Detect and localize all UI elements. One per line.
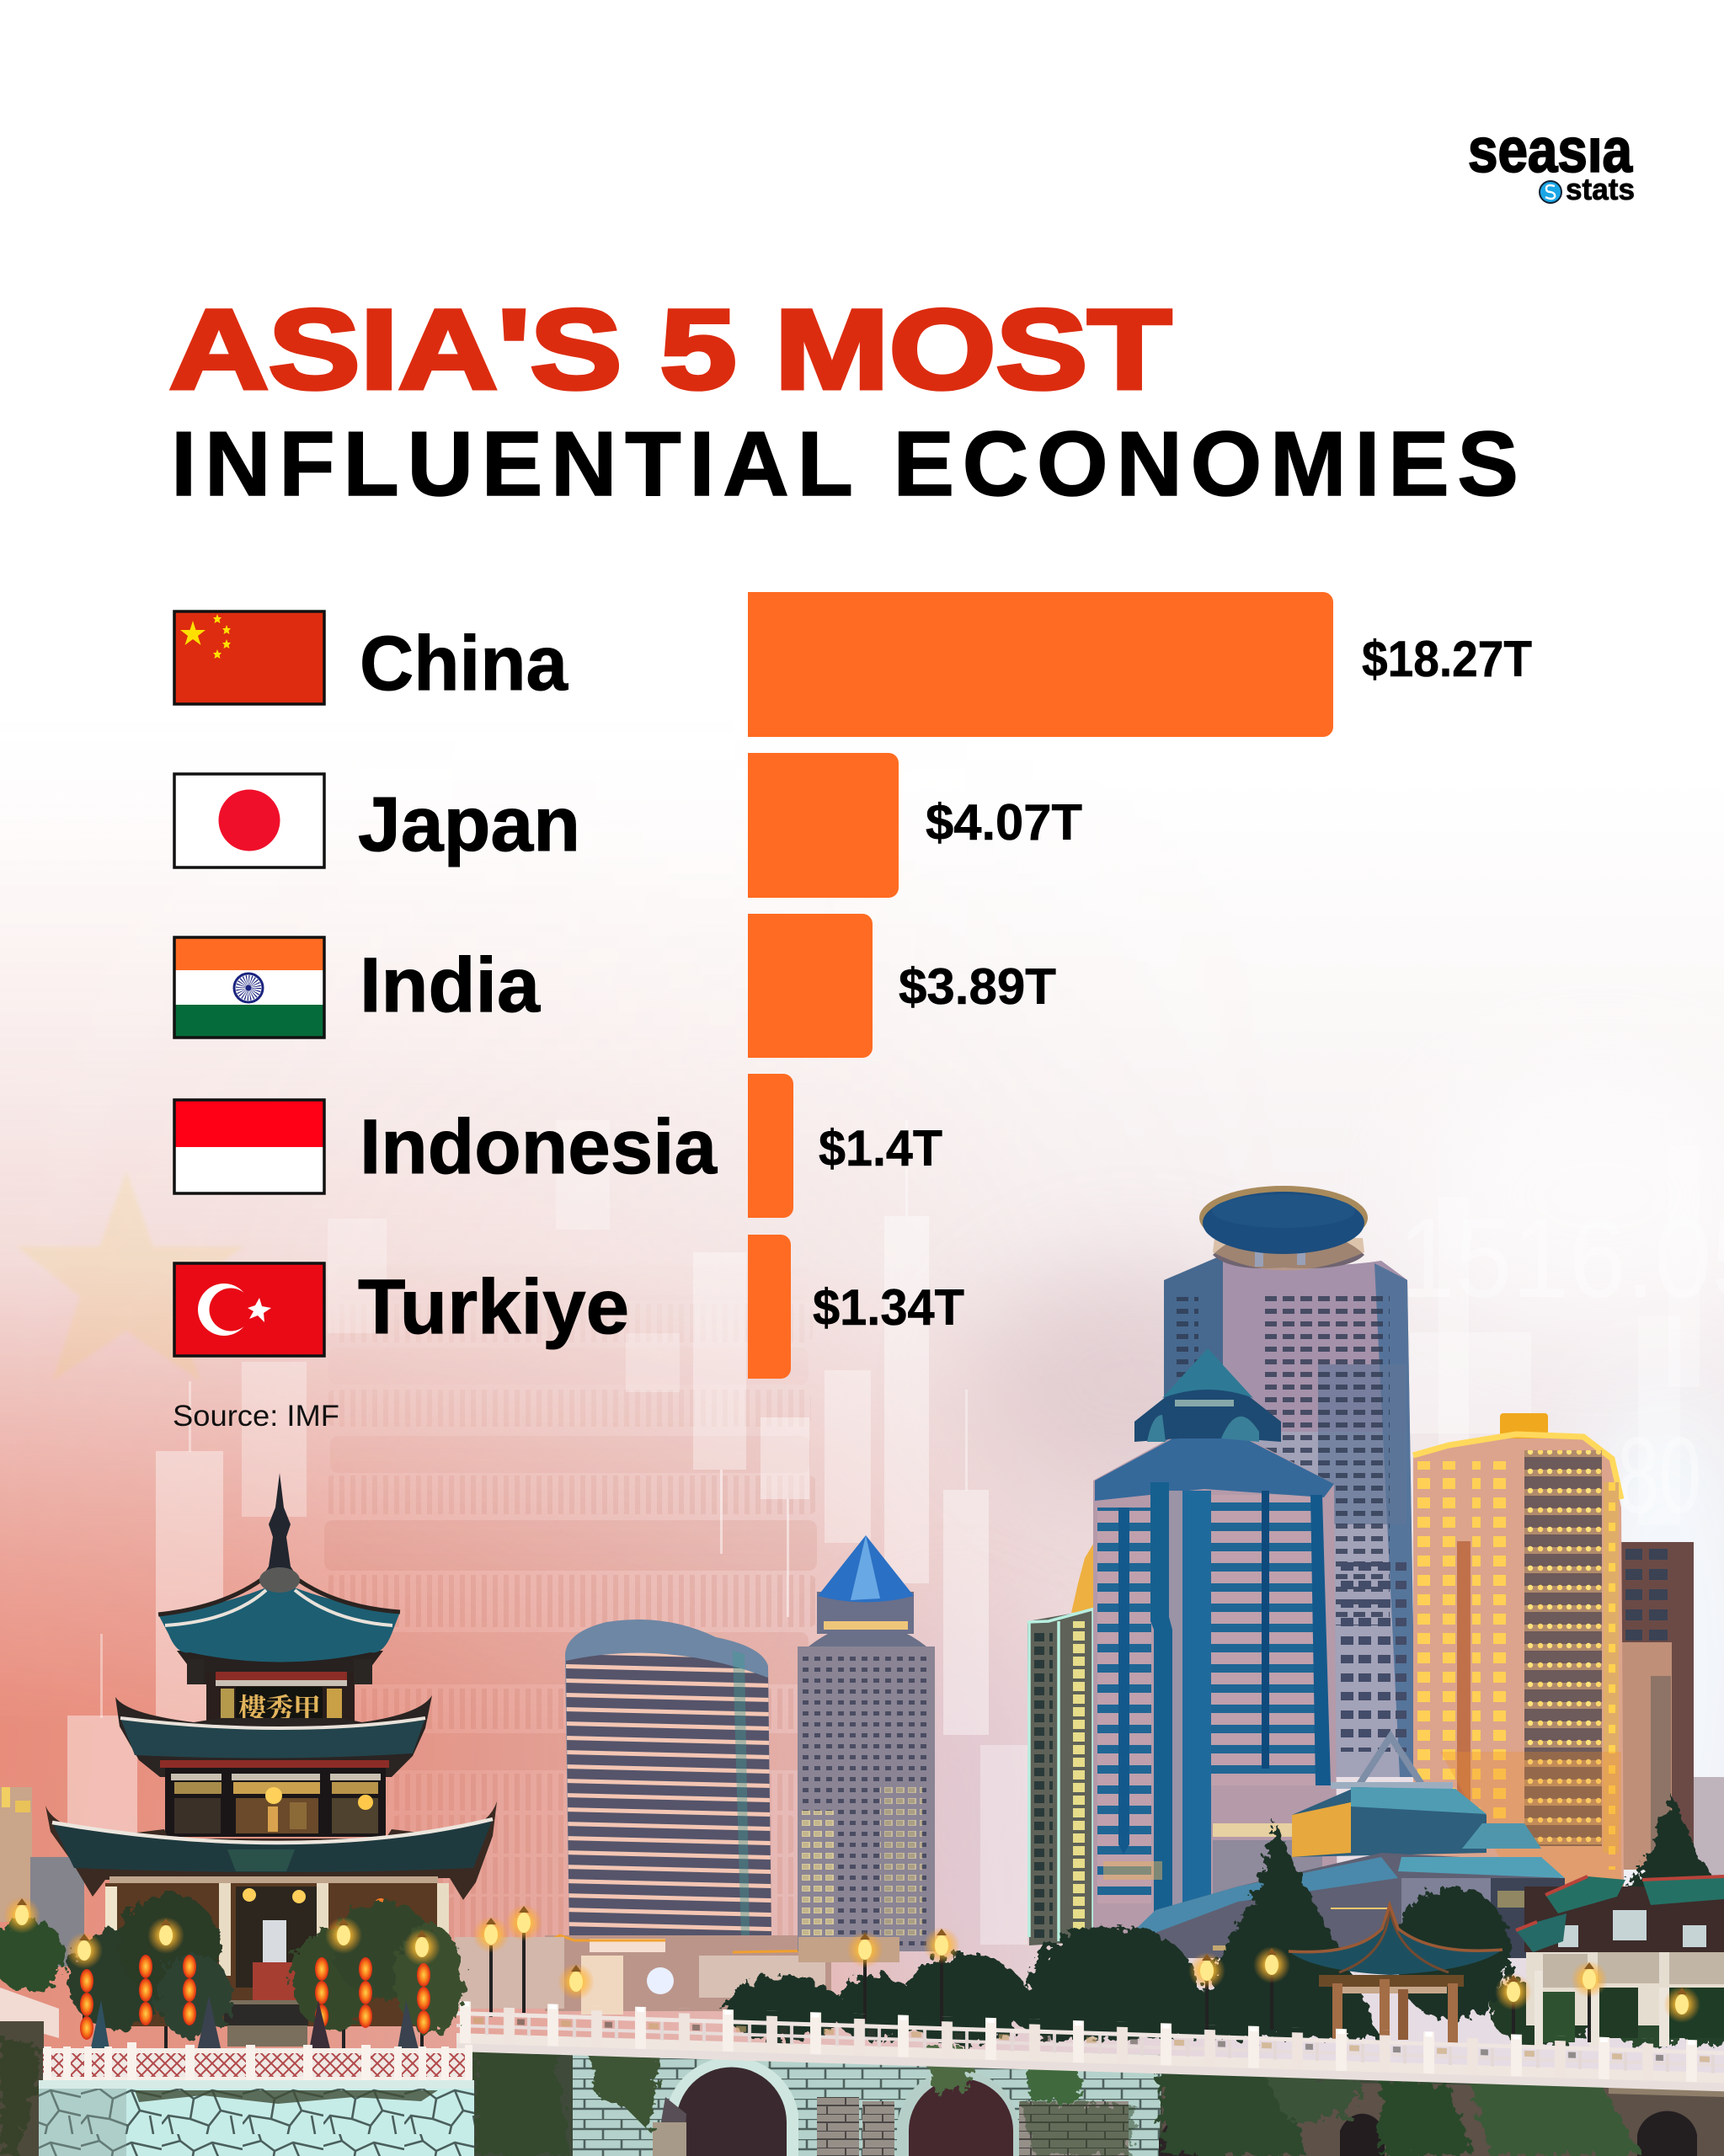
logo: seasia stats: stats [1566, 172, 1635, 206]
row: China: China [360, 621, 568, 707]
front blue tower [1093, 1348, 1337, 1940]
flag: Turkiye [174, 1263, 324, 1356]
row: Indonesia: $1.4T [819, 1120, 942, 1177]
pagoda: windowed storey [165, 1768, 386, 1837]
cone-top tower [798, 1535, 935, 1962]
flag: India [174, 937, 324, 1038]
ivy on the bridge [476, 2042, 1642, 2156]
round striped tower [565, 1620, 771, 1941]
pavilion [1289, 1902, 1502, 2044]
flag: China [174, 611, 324, 704]
candlestick watermarks [67, 1120, 1700, 1945]
flag: Indonesia [174, 1100, 324, 1193]
background: white to salmon wash [0, 879, 1724, 2073]
row: India [174, 914, 1056, 1058]
bridge stonework and arches [472, 2038, 1724, 2156]
row: Indonesia: Indonesia [360, 1104, 718, 1190]
row: India: India [360, 942, 541, 1028]
pagoda: top storey [158, 1567, 400, 1729]
pagoda terrace railing [43, 2042, 472, 2084]
title [169, 287, 1519, 515]
logo: globe badge [1540, 181, 1561, 203]
glass podium with teal roofs [1132, 1737, 1565, 1958]
coin stack watermark [324, 1390, 817, 1939]
street lamp posts [22, 1929, 1589, 2055]
golden residential tower [1413, 1413, 1624, 1886]
pagoda: bottom roof [45, 1801, 497, 1900]
flag: Japan [174, 774, 324, 867]
podium building behind the bridge [455, 1935, 831, 2015]
pagoda: middle roof [115, 1695, 432, 1777]
row: China: $18.27T [1362, 631, 1532, 687]
bridge balustrade [456, 2001, 1724, 2091]
row: India: $3.89T [899, 958, 1056, 1015]
left distant buildings [0, 1787, 84, 1967]
bar chart: GDP by country [174, 592, 1532, 1379]
pagoda stone wall [39, 2080, 474, 2156]
pagoda: ground floor [105, 1883, 449, 2047]
memorial gate [1516, 1876, 1724, 2047]
faint star watermark [17, 1171, 244, 1381]
logo: seasia stats: seasia [1468, 115, 1633, 185]
title: ASIA'S 5 MOST [169, 287, 1172, 413]
pagoda: top storey: 樓秀甲 [238, 1694, 321, 1725]
lanterns and lamps [3, 1897, 1700, 2040]
rear round-top tower [1164, 1186, 1416, 1777]
row: Turkiye: Turkiye [358, 1264, 629, 1350]
title: INFLUENTIAL ECONOMIES [171, 413, 1519, 515]
faint ticker numbers [1398, 1196, 1724, 1536]
row: Turkiye: $1.34T [813, 1279, 964, 1336]
green-lit tower [1027, 1541, 1095, 1945]
left foreground wall and rail [0, 1919, 65, 2156]
pagoda terrace umbrellas [88, 1996, 421, 2059]
logo: seasia stats [1468, 115, 1635, 206]
pagoda trees [67, 1893, 463, 2038]
pagoda: spire [258, 1473, 302, 1583]
trees behind the bridge [724, 1794, 1724, 2047]
row: Indonesia [174, 1074, 942, 1218]
row: Turkiye [174, 1235, 964, 1379]
row: China [174, 592, 1532, 737]
row: Japan: $4.07T [926, 794, 1082, 851]
right background tower [1621, 1542, 1724, 1886]
row: Japan: Japan [358, 782, 580, 867]
row: Japan [174, 753, 1082, 898]
pagoda tower [45, 1473, 497, 2047]
source note: Source: IMF [173, 1400, 339, 1433]
